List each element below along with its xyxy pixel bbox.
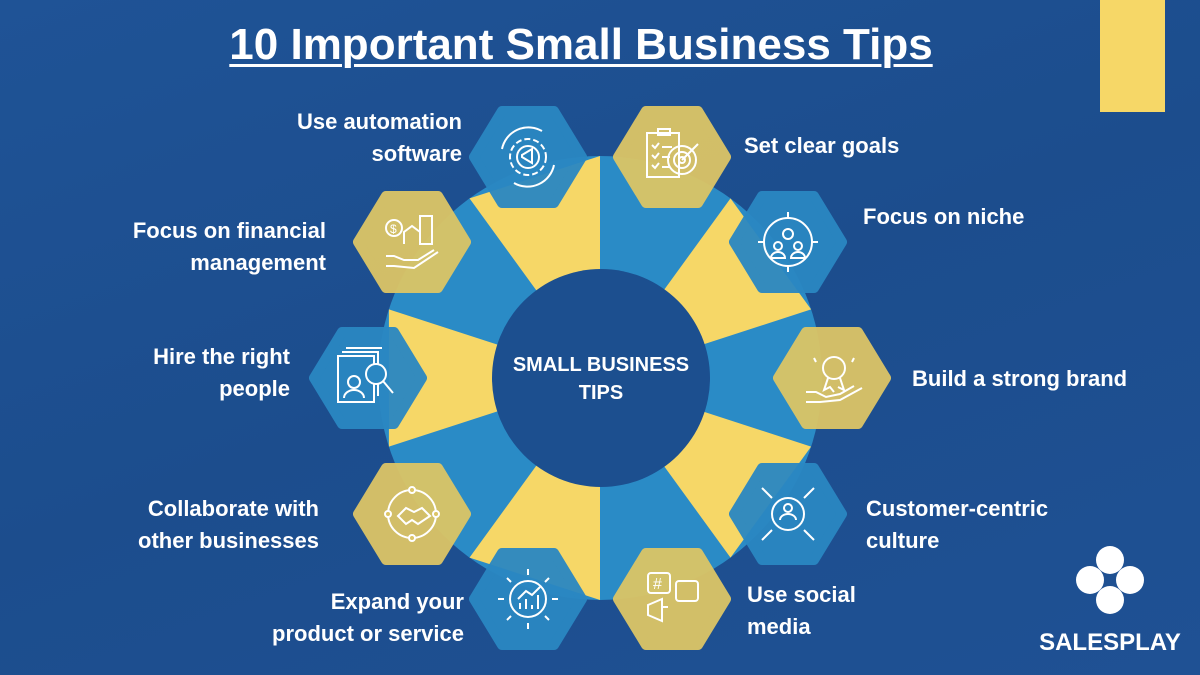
logo: salesplay [1039,546,1181,656]
label: customer-centric culture [866,496,1048,553]
hex: collaborate with other businesses [358,468,466,560]
label: use automation software: software [372,141,462,166]
label: use automation software: Use automation [297,109,462,134]
label: hire the right people: Hire the right [153,344,290,369]
label: expand your product or service: Expand your [331,589,464,614]
logo: salesplay: SALESPLAY [1039,629,1181,656]
label: focus on financial management: management [190,250,326,275]
label: use social media: Use social [747,582,856,607]
decorative yellow bar [1100,0,1165,112]
label: build a strong brand: Build a strong brand [912,366,1127,391]
label: use social media [747,582,856,639]
hex: use social media [618,553,726,645]
label: use social media: media [747,614,811,639]
hex: expand your product or service [474,553,582,645]
label: expand your product or service: product or service [272,621,464,646]
label: hire the right people: people [219,376,290,401]
hex: customer-centric culture [734,468,842,560]
hex: build a strong brand [778,332,886,424]
hex: use automation software [474,111,582,203]
label: set clear goals: Set clear goals [744,133,899,158]
center circle: TIPS [579,382,623,404]
center circle [492,269,710,487]
label: customer-centric culture: Customer-centric [866,496,1048,521]
label: use automation software [297,109,462,166]
label: focus on financial management: Focus on financial [133,218,326,243]
label: collaborate with other businesses: Collaborate with [148,496,319,521]
label: expand your product or service [272,589,464,646]
hex: use social media: # [653,576,662,593]
label: focus on financial management [133,218,326,275]
title: 10 Important Small Business Tips [229,20,933,69]
label: collaborate with other businesses: other businesses [138,528,319,553]
label: collaborate with other businesses [138,496,319,553]
hex: focus on niche [734,196,842,288]
center circle: SMALL BUSINESS [513,354,689,376]
hex: set clear goals [618,111,726,203]
hex: focus on financial management [358,196,466,288]
label: hire the right people [153,344,290,401]
hex: hire the right people [314,332,422,424]
hex: focus on financial management: $ [390,222,397,236]
label: customer-centric culture: culture [866,528,939,553]
label: focus on niche: Focus on niche [863,204,1024,229]
